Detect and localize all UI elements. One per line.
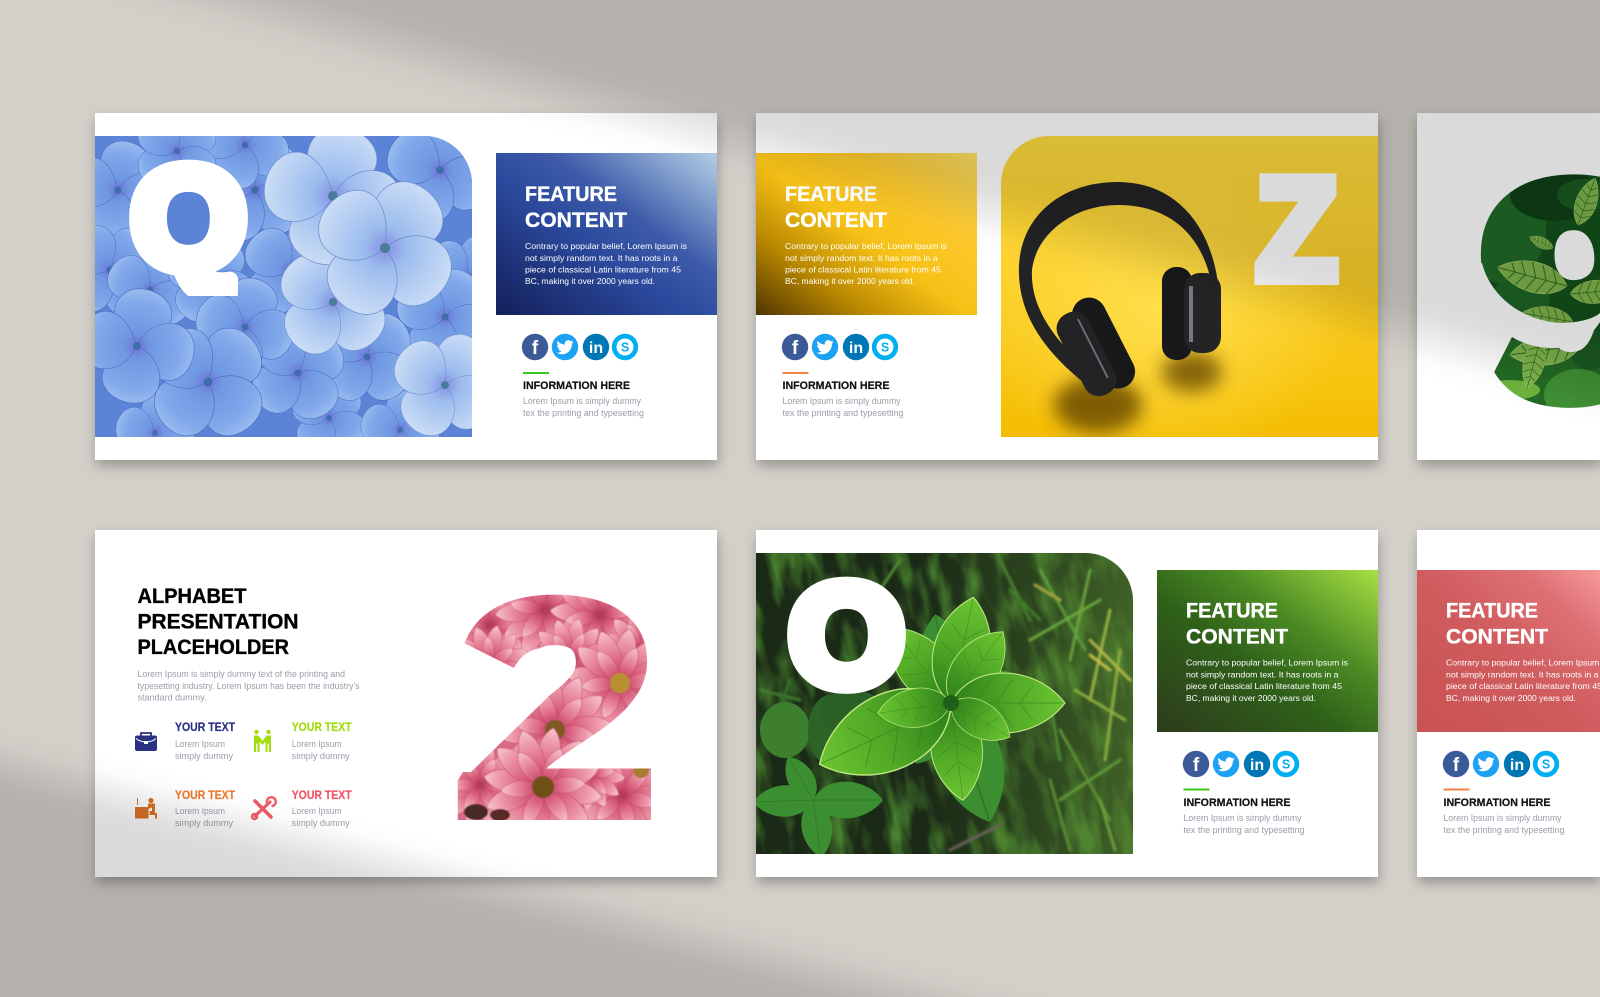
feature box: FEATURE (1186, 600, 1278, 622)
intro text (138, 669, 360, 702)
feature box: Contrary to popular belief, Lorem Ipsum is (525, 241, 687, 251)
social icons (1443, 751, 1559, 777)
title: ALPHABET (138, 585, 247, 608)
info block: Lorem Ipsum is simply dummy (782, 396, 901, 406)
info block: INFORMATION HERE (523, 380, 630, 392)
social icons: in (589, 340, 603, 357)
title (138, 585, 298, 659)
feature box (1417, 570, 1600, 732)
item: handshake: Lorem Ipsum (292, 739, 342, 749)
item: tools: simply dummy (292, 818, 350, 828)
feature box: FEATURE (1446, 600, 1538, 622)
social icons: in (849, 340, 863, 357)
social icons: S (621, 340, 629, 354)
feature box: piece of classical Latin literature from 45 (1186, 681, 1342, 691)
feature box: FEATURE (525, 183, 617, 206)
feature box (1157, 570, 1378, 732)
info block: Lorem Ipsum is simply dummy (523, 396, 642, 406)
info block: Lorem Ipsum is simply dummy (1184, 813, 1302, 823)
slide: Z feature (756, 113, 1378, 460)
item: briefcase (135, 722, 235, 761)
feature box: CONTENT (785, 209, 887, 232)
info block: tex the printing and typesetting (782, 408, 904, 418)
intro text: typesetting industry. Lorem Ipsum has been the industry's (138, 681, 360, 691)
item: handshake: YOUR TEXT (292, 722, 352, 734)
item: briefcase: Lorem Ipsum (175, 739, 225, 749)
icon: person at desk (135, 798, 157, 818)
item: briefcase: YOUR TEXT (175, 722, 235, 734)
feature box: BC, making it over 2000 years old. (1186, 693, 1316, 703)
info block (782, 372, 904, 418)
info block: tex the printing and typesetting (1184, 825, 1305, 835)
photo: headphones on yellow (1001, 136, 1378, 437)
social icons: S (1542, 758, 1550, 772)
item: desk: Lorem Ipsum (175, 806, 225, 816)
item: handshake: simply dummy (292, 751, 350, 761)
social icons (1183, 751, 1299, 777)
social icons: f (792, 338, 799, 359)
big number 9 filled with leaf photo (1480, 174, 1600, 408)
info block: INFORMATION HERE (1444, 797, 1550, 809)
item: handshake (254, 722, 352, 761)
feature box: Contrary to popular belief, Lorem Ipsum is (1186, 658, 1348, 668)
info block (523, 372, 644, 418)
feature box: not simply random text. It has roots in a (785, 253, 938, 263)
title: PLACEHOLDER (138, 636, 289, 659)
item: desk: simply dummy (175, 818, 234, 828)
info block (1184, 788, 1305, 835)
icon: crossed wrench and screwdriver (252, 797, 276, 819)
feature box: Contrary to popular belief, Lorem Ipsum is (785, 241, 947, 251)
social icons: in (1510, 757, 1524, 774)
item: tools: YOUR TEXT (292, 790, 352, 802)
big letter Z: Z (1256, 148, 1337, 310)
slide: alphabet presentation (95, 530, 717, 877)
intro text: Lorem Ipsum is simply dummy text of the printing and (138, 669, 345, 679)
feature box (756, 153, 977, 315)
feature box: FEATURE (785, 183, 877, 206)
social icons: in (1250, 757, 1264, 774)
info block: Lorem Ipsum is simply dummy (1444, 813, 1562, 823)
feature box: CONTENT (1446, 626, 1548, 648)
feature box: piece of classical Latin literature from 45 (1446, 681, 1600, 691)
big letter Q: Q (131, 138, 246, 298)
info block: INFORMATION HERE (1184, 797, 1290, 809)
icon: briefcase (135, 733, 157, 751)
feature box: not simply random text. It has roots in a (1186, 670, 1339, 680)
slide: O feature (751, 530, 1385, 889)
item: desk (135, 790, 235, 828)
social icons: f (532, 338, 539, 359)
social icons: S (881, 340, 889, 354)
item: tools: Lorem Ipsum (292, 806, 342, 816)
social icons (782, 334, 898, 360)
feature box: BC, making it over 2000 years old. (785, 276, 915, 286)
feature box: piece of classical Latin literature from 45 (785, 264, 941, 274)
slide: number 9 (1417, 113, 1600, 460)
feature box: CONTENT (525, 209, 627, 232)
title: PRESENTATION (138, 610, 298, 634)
icon: two people shaking hands (254, 730, 271, 752)
slide: red feature, cropped by page edge (1417, 530, 1600, 877)
info block: INFORMATION HERE (782, 380, 890, 392)
feature box: not simply random text. It has roots in a (1446, 670, 1599, 680)
feature box: not simply random text. It has roots in a (525, 253, 678, 263)
social icons (522, 334, 638, 360)
feature box: BC, making it over 2000 years old. (1446, 693, 1576, 703)
intro text: standard dummy. (138, 692, 206, 702)
photo: blue hydrangea (95, 136, 472, 437)
social icons: f (1453, 755, 1460, 776)
item: tools (252, 790, 352, 828)
item: desk: YOUR TEXT (175, 790, 235, 802)
big number 2 filled with pink flowers (458, 594, 651, 820)
big letter O: O (789, 555, 904, 715)
info block: tex the printing and typesetting (523, 408, 644, 418)
info block: tex the printing and typesetting (1444, 825, 1565, 835)
social icons: f (1193, 755, 1200, 776)
slide: Q feature (90, 113, 724, 472)
item: briefcase: simply dummy (175, 751, 234, 761)
social icons: S (1282, 758, 1290, 772)
feature box (496, 153, 717, 315)
info block (1444, 788, 1565, 835)
feature box: BC, making it over 2000 years old. (525, 276, 655, 286)
feature box: piece of classical Latin literature from 45 (525, 264, 681, 274)
feature box: CONTENT (1186, 626, 1288, 648)
photo: green plant (756, 553, 1133, 854)
